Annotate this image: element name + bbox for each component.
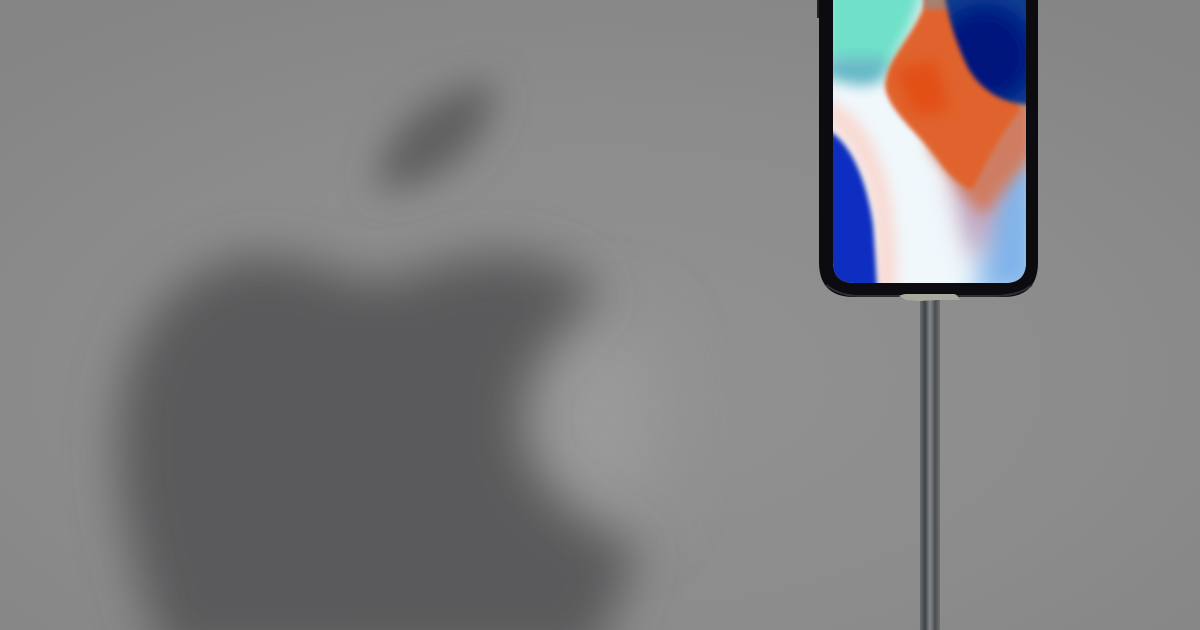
apple body <box>118 254 640 630</box>
light blue corner <box>960 155 1026 283</box>
navy shape <box>944 0 1034 105</box>
phone <box>817 0 1040 297</box>
glow beside apple bite <box>550 320 650 520</box>
side button <box>817 0 819 18</box>
stand <box>899 294 960 630</box>
blurred apple logo <box>118 82 640 630</box>
mauve transition <box>950 170 1005 260</box>
apple leaf <box>378 82 494 190</box>
teal area <box>825 0 925 72</box>
stand pole <box>920 298 940 630</box>
blue shape <box>828 130 877 290</box>
pale rose band <box>825 98 896 290</box>
grey-brown top of orange <box>922 0 950 10</box>
photo scene <box>96 0 1038 630</box>
phone screen wallpaper <box>833 0 1026 283</box>
phone body <box>819 0 1038 297</box>
stand connector <box>899 294 960 301</box>
orange shape <box>885 0 1020 190</box>
salmon area <box>930 95 1036 215</box>
phone edge highlight <box>826 285 1032 296</box>
